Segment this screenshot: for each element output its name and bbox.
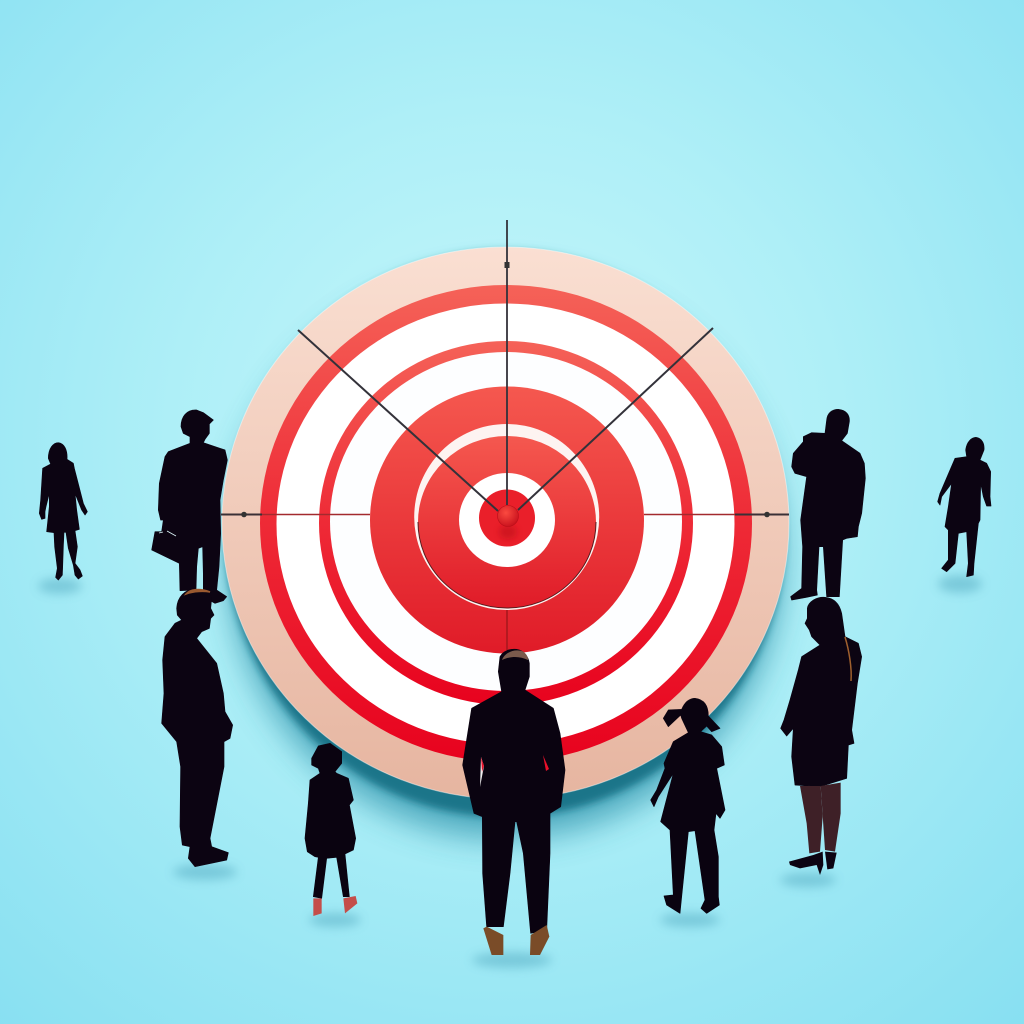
target shadow <box>226 251 784 838</box>
people on the right <box>781 409 991 787</box>
floor shadows <box>38 575 982 968</box>
person: center man from behind <box>463 649 565 933</box>
shoes of center man <box>483 925 549 955</box>
people on the left <box>39 410 233 867</box>
person: far right woman <box>938 437 991 577</box>
legs of right woman <box>800 783 841 853</box>
hair highlight of right woman <box>845 637 851 681</box>
person: girl with pigtails <box>651 698 725 913</box>
shoes of small girl <box>313 896 357 916</box>
ball shadow <box>499 525 517 539</box>
center ball <box>498 506 518 526</box>
person: lower left man in suit <box>162 589 233 867</box>
person: right woman with long hair <box>781 597 862 787</box>
people in front <box>305 649 725 933</box>
gaps beside center man's arms <box>480 755 549 787</box>
person: right man on phone <box>791 409 865 600</box>
target board <box>222 247 789 799</box>
person: small girl <box>305 743 356 898</box>
person: left man with bag <box>152 410 227 603</box>
person: far left woman <box>39 443 87 580</box>
hair of center man <box>502 650 528 660</box>
hair highlight of lower left man <box>186 590 210 594</box>
bag handle <box>159 531 176 536</box>
shoes of right woman <box>789 852 837 875</box>
target crosshair lines <box>221 220 789 650</box>
